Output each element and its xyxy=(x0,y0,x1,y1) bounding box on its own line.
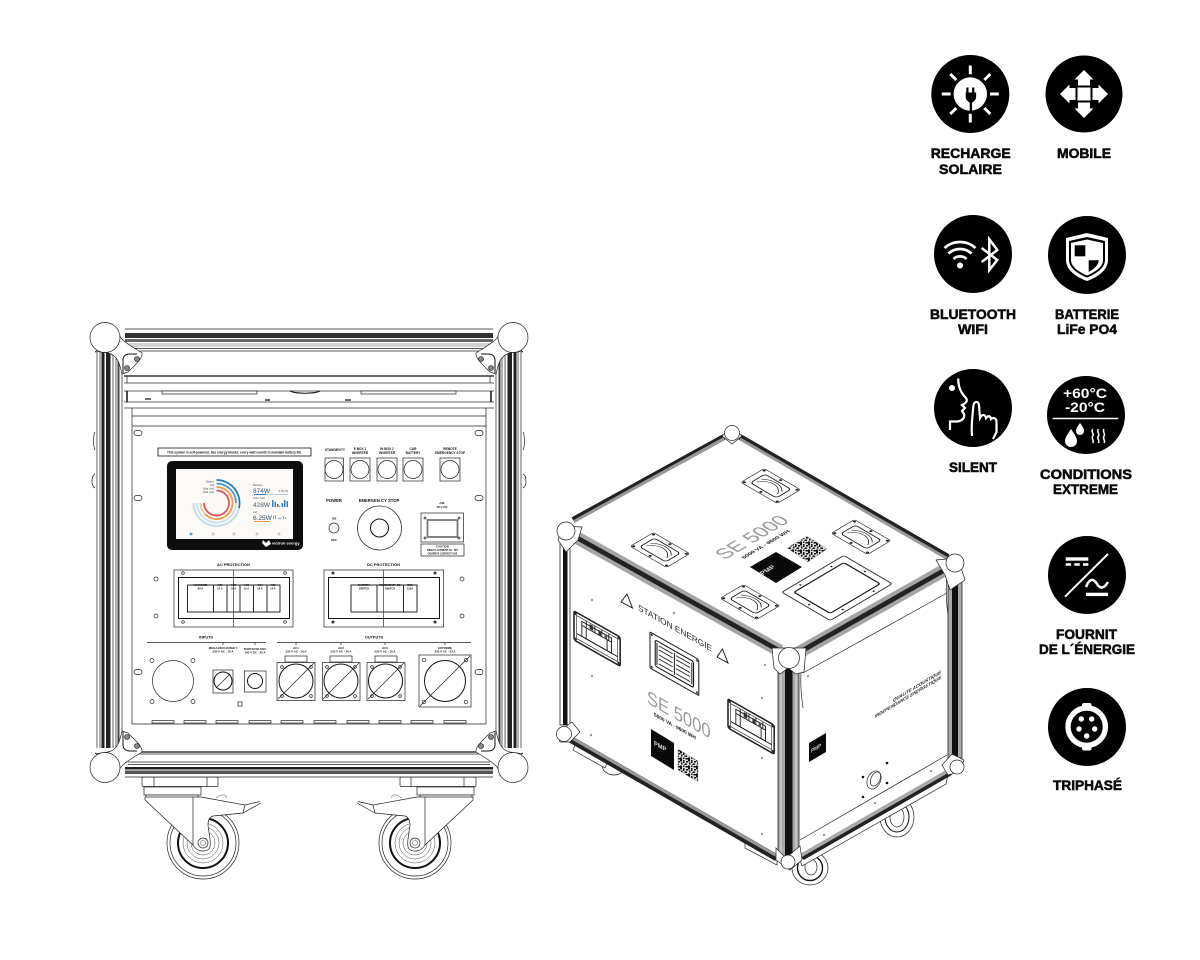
label: bluetooth wifi: BLUETOOTH xyxy=(930,306,1016,322)
outputs group: 230 V AC - 16 A xyxy=(330,650,352,654)
icon: extreme conditions: +60°C xyxy=(1063,385,1107,401)
iso right face inner lines xyxy=(800,570,948,840)
touch screen: Solar yield xyxy=(203,491,215,494)
outputs group: AC3 xyxy=(382,646,388,650)
power switch: ON xyxy=(332,516,336,520)
notice box xyxy=(158,448,311,456)
left face handle xyxy=(574,611,620,666)
left face rivets xyxy=(590,599,932,836)
top face logo xyxy=(750,552,802,583)
touch screen: 874W xyxy=(253,488,271,495)
AC protection panel: AC4 xyxy=(257,583,263,587)
top face handle: front xyxy=(720,585,780,619)
inputs group xyxy=(147,636,267,706)
label: batterie: LiFe PO4 xyxy=(1057,321,1117,337)
DC protection panel: SWITCH xyxy=(385,586,395,590)
iso box body xyxy=(565,433,957,862)
left face QR code xyxy=(678,749,698,782)
DC protection panel: EMERGENCY DC xyxy=(379,583,401,587)
left face logo xyxy=(651,729,674,770)
AC protection panel: 27 A xyxy=(217,586,223,590)
outputs group: OUTPUTS xyxy=(365,636,384,640)
iso rail: back right xyxy=(740,437,948,558)
inputs group: MEGA-RECHARGE 5 xyxy=(209,646,238,650)
right face slogan: INDEPENDANCE ENERGETIQUE xyxy=(875,674,942,720)
corner: top right xyxy=(476,322,528,374)
label: fournit de l'energie: DE L´ÉNERGIE xyxy=(1039,641,1135,657)
touch screen: 6.25W xyxy=(253,515,273,522)
top rail xyxy=(122,328,496,352)
DC breaker box with caution: OBSERVE CORRECT USE xyxy=(428,552,458,556)
icon: three-phase socket xyxy=(1048,688,1126,766)
top face handle: left xyxy=(630,533,690,567)
top face QR code xyxy=(787,536,827,562)
control button row: BATTERY xyxy=(406,451,421,455)
touch screen: 4:55:33 xyxy=(279,489,288,493)
left face warning title: STATION ENERGIE xyxy=(638,602,712,654)
left side rail xyxy=(92,352,124,748)
label: fournit de l'energie: FOURNIT xyxy=(1056,626,1117,642)
iso corner balls xyxy=(556,426,965,870)
control button row: INVERTER xyxy=(352,451,369,455)
inputs group: INPUTS xyxy=(199,636,213,640)
top face window xyxy=(782,556,892,620)
AC protection panel: AC3 xyxy=(244,583,250,587)
label: bluetooth wifi: WIFI xyxy=(958,321,988,337)
iso rail: front left xyxy=(570,531,782,655)
label: triphase: TRIPHASÉ xyxy=(1053,777,1122,793)
touch screen: 428W xyxy=(253,502,271,509)
AC protection panel: 16 A xyxy=(270,586,276,590)
touch screen: victron energy xyxy=(272,540,300,546)
AC protection panel xyxy=(174,562,293,627)
corner: bottom right xyxy=(476,731,528,782)
emergency stop: EMERGEN CY STOP xyxy=(359,498,399,503)
DC protection panel: DC PROTECTION xyxy=(367,562,400,567)
touch screen xyxy=(167,461,303,550)
AC protection panel: AC1 xyxy=(217,583,223,587)
bottom rail xyxy=(123,752,495,777)
control button row: E BOX 1 xyxy=(354,447,367,451)
label: recharge solaire: SOLAIRE xyxy=(939,161,1002,177)
outputs group xyxy=(277,636,471,707)
AC protection panel: 16 A xyxy=(244,586,249,590)
ring chart xyxy=(194,480,240,526)
inputs group: PHOTOVOLTAIC xyxy=(244,647,267,651)
icon: battery shield xyxy=(1048,216,1126,294)
DC breaker box with caution: A/B xyxy=(439,501,445,505)
control button row xyxy=(325,447,466,481)
iso wheels and skirts xyxy=(573,745,948,885)
label: batterie: BATTERIE xyxy=(1055,306,1119,322)
caster: right wheel xyxy=(357,777,476,879)
label: silent: SILENT xyxy=(949,459,997,475)
touch screen: Batteries xyxy=(253,484,264,487)
top face model name: 5000 VA - 9600 WH xyxy=(741,529,793,560)
AC protection panel: AC2 xyxy=(231,583,237,587)
left face logo: PMP xyxy=(654,740,667,754)
panel mounting slots xyxy=(134,430,483,723)
AC protection panel: 80 A xyxy=(198,586,203,590)
outputs group: AC1 xyxy=(293,646,299,650)
power switch: OFF xyxy=(331,538,337,542)
control button row: IN BOX 2 xyxy=(380,447,394,451)
label: conditions extreme: CONDITIONS xyxy=(1040,466,1132,482)
iso rail: front right xyxy=(796,563,952,657)
touch screen: Cell xyxy=(253,511,258,514)
label: recharge solaire: RECHARGE xyxy=(931,145,1011,161)
left face vent plate xyxy=(650,632,699,696)
right face logo xyxy=(809,733,826,762)
label: recharge solaire xyxy=(931,145,1011,177)
right side rail xyxy=(494,352,526,748)
caster: left wheel xyxy=(142,777,261,879)
touch screen: Solar yield xyxy=(203,488,215,490)
DC breaker box with caution: DIRECT CURRENT 48 - 58V xyxy=(427,549,458,552)
label: fournit de l'energie xyxy=(1039,626,1135,657)
control button row: EMERGENCY STOP xyxy=(435,451,466,455)
DC protection panel xyxy=(324,562,444,627)
notice box: This system is self-powered, has energy blocks; every watt counts to maintain battery life. xyxy=(167,451,302,455)
touch screen: Battery xyxy=(206,480,215,484)
DC breaker box with caution: 48 V DC xyxy=(436,505,448,509)
outputs group: 230 V AC - 16 A xyxy=(286,650,307,654)
control button row: INVERTER xyxy=(379,451,396,455)
inputs group: 230 V AC - 16 A xyxy=(212,650,234,654)
front frame background and rack bands xyxy=(122,352,496,752)
top face handle: right xyxy=(831,520,891,554)
DC protection panel: 125A xyxy=(407,586,413,590)
DC protection panel: BATTERY xyxy=(358,583,370,587)
front view of flight case xyxy=(90,322,528,879)
icon: solar recharge xyxy=(931,55,1009,133)
AC protection panel: AC5 xyxy=(270,583,276,587)
right face cable port xyxy=(862,762,888,798)
AC protection panel: MAIN/GRID xyxy=(194,583,208,587)
corner: bottom left xyxy=(90,731,142,782)
label: batterie xyxy=(1055,306,1119,337)
outputs group: AC2 xyxy=(338,646,344,650)
right side of left face handle xyxy=(728,699,774,754)
outputs group: 230 V AC - 32 A xyxy=(434,650,456,654)
AC protection panel: 16 A xyxy=(257,586,263,590)
inputs group: 140 V DC - 35 A xyxy=(244,650,266,654)
isometric view of flight case xyxy=(556,426,965,885)
touch screen: Cell xyxy=(210,484,214,487)
icon: AC DC energy xyxy=(1048,536,1126,614)
outputs group: 230 V AC - 16 A xyxy=(374,650,396,654)
control button row: REMOTE xyxy=(443,447,457,451)
icon: extreme conditions: -20°C xyxy=(1065,399,1105,415)
right face slogan: QUALITE ACOUSTIQUE xyxy=(893,669,942,704)
DC breaker box with caution: CAUTION xyxy=(436,544,449,548)
AC protection panel: 16 A xyxy=(231,586,236,590)
power switch xyxy=(326,498,342,542)
label: conditions extreme xyxy=(1040,466,1132,497)
left face warning title xyxy=(621,594,728,663)
icon: wifi and bluetooth xyxy=(934,215,1012,293)
control button row: CAR xyxy=(410,447,417,451)
iso rail: bottom right xyxy=(801,770,950,857)
iso rail: front vertical xyxy=(778,668,799,858)
outputs group: EXTREME xyxy=(438,646,452,650)
power switch: POWER xyxy=(326,498,342,503)
icon: extreme conditions xyxy=(1047,376,1125,454)
label: bluetooth wifi xyxy=(930,306,1016,337)
AC protection panel: AC PROTECTION xyxy=(217,562,250,567)
right face logo: PMP xyxy=(811,743,822,755)
touch screen: Solar Yield xyxy=(253,497,266,500)
emergency stop xyxy=(358,498,402,550)
icon: mobile arrows xyxy=(1046,56,1122,132)
DC breaker box with caution xyxy=(421,501,464,556)
iso rail: bottom left xyxy=(570,738,778,858)
label: conditions extreme: EXTREME xyxy=(1053,481,1118,497)
control button row: STANDBY/TY xyxy=(325,448,346,452)
DC protection panel: SWITCH xyxy=(359,586,369,590)
label: mobile: MOBILE xyxy=(1057,145,1111,161)
left face model name: SE 5000 xyxy=(647,687,711,744)
left face model name: 5000 VA - 9600 WH xyxy=(654,712,696,742)
iso rail: back left xyxy=(573,437,724,522)
icon: silent xyxy=(934,369,1012,447)
top face handle: back xyxy=(741,469,800,503)
corner: top left xyxy=(90,322,142,374)
iso rail: right vertical xyxy=(948,572,962,758)
iso rail: left vertical xyxy=(560,540,570,725)
top face logo: PMP xyxy=(759,565,778,576)
top face model name: SE 5000 xyxy=(710,513,795,563)
DC protection panel: DC2 xyxy=(407,583,413,587)
